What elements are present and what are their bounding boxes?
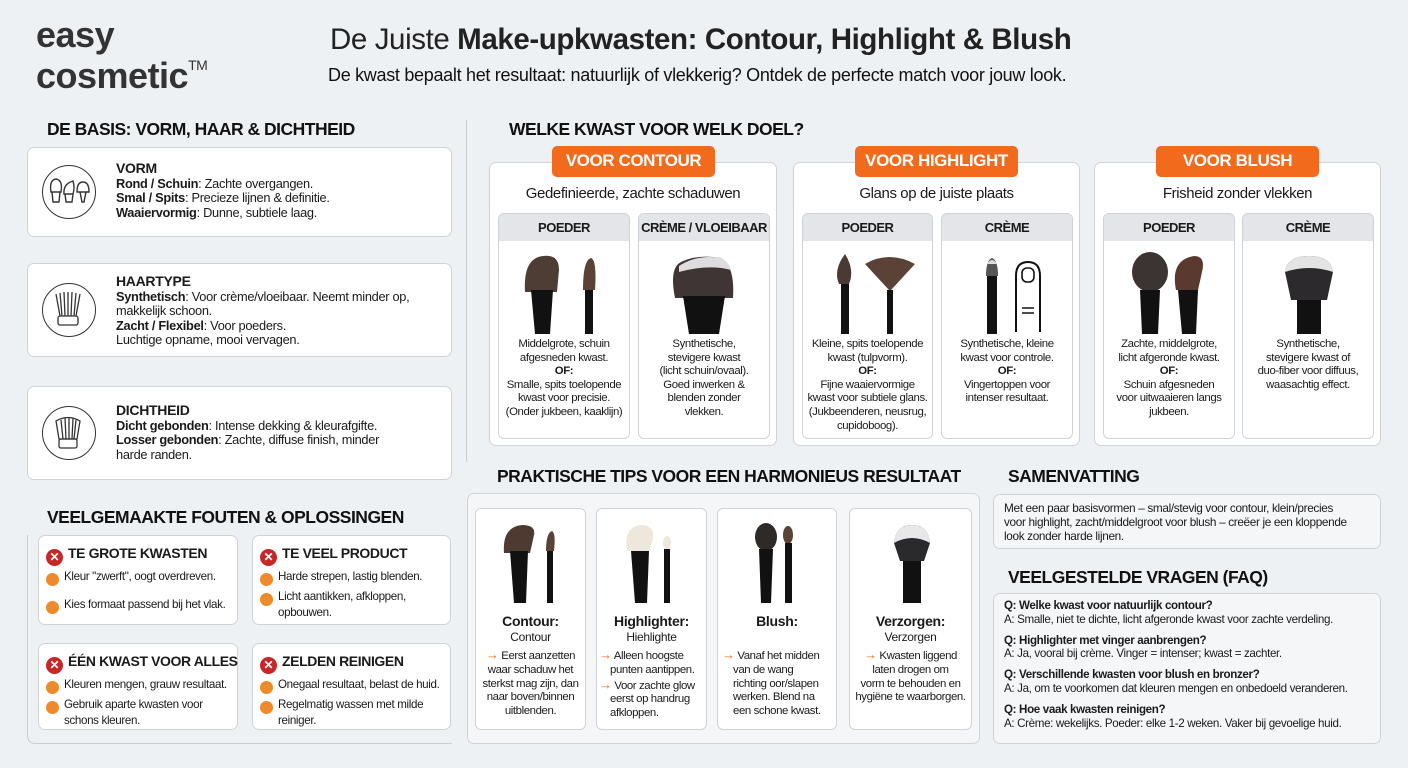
sub: poeder: POEDER [842, 220, 893, 235]
text: haartype: HAARTYPE [116, 273, 191, 289]
tip: highlighter: Hiehlighte [626, 630, 677, 644]
text block: samenvatting: voor highlight, zacht/middelgroot voor blush – creëer je een kloppende [1004, 515, 1347, 529]
brushes [837, 254, 915, 334]
card: zelden reinigen: ZELDEN REINIGEN [282, 653, 404, 669]
text: haartype: Synthetisch: Voor crème/vloeibaar. Neemt minder op, [116, 288, 409, 304]
sub: creme: Synthetische, [672, 338, 736, 350]
card: haartype [27, 263, 452, 357]
tip: verzorgen [849, 508, 972, 730]
card: zelden reinigen [252, 643, 451, 730]
sub: poeder: Middelgrote, schuin [518, 338, 610, 350]
title: De Juiste Make-upkwasten: Contour, Highlight & Blush [330, 23, 1071, 56]
tip: verzorgen: laten drogen om [872, 664, 949, 676]
panel: faq: Q: Hoe vaak kwasten reinigen? [1004, 703, 1165, 716]
panel: highlight [793, 162, 1080, 446]
tip: highlighter: afkloppen. [610, 707, 659, 719]
tip: verzorgen: vorm te behouden en [860, 678, 961, 690]
subtitle: De kwast bepaalt het resultaat: natuurlijk of vlekkerig? Ontdek de perfecte match voor jouw look. [328, 65, 1066, 85]
heading: praktische tips: PRAKTISCHE TIPS VOOR EEN HARMONIEUS RESULTAAT [497, 466, 961, 486]
tip: highlighter: Highlighter: [614, 613, 689, 629]
card: te grote kwasten [38, 535, 238, 625]
text: vorm [116, 160, 330, 220]
badge: voor contour [552, 146, 715, 177]
sub: poeder: POEDER [1143, 220, 1195, 235]
heading: samenvatting: SAMENVATTING [1008, 466, 1139, 486]
text: vorm: Waaiervormig: Dunne, subtiele laag. [116, 204, 317, 220]
sub: creme: Synthetische, [1276, 338, 1340, 350]
card: zelden reinigen: Regelmatig wassen met milde [278, 698, 423, 711]
panel: faq: A: Ja, vooral bij crème. Vinger = intenser; kwast = zachter. [1004, 647, 1282, 660]
sub: poeder: (Jukbeenderen, neusrug, [809, 406, 926, 418]
sub: poeder: kwast (tulpvorm). [828, 352, 907, 364]
card: een kwast voor alles: Kleuren mengen, grauw resultaat. [64, 678, 227, 691]
icon: brush shapes [42, 165, 96, 219]
card: te grote kwasten: Kleur "zwerft", oogt overdreven. [64, 570, 216, 583]
badge: voor highlight [855, 146, 1018, 177]
card: dichtheid [27, 386, 452, 480]
sub: poeder: POEDER [538, 220, 590, 235]
tip: contour: sterkst mag zijn, dan [482, 678, 579, 690]
panel: faq: A: Crème: wekelijks. Poeder: elke 1-2 weken. Vaker bij gevoelige huid. [1004, 717, 1341, 730]
card: zelden reinigen: ✕ [263, 658, 274, 672]
heading: fouten: VEELGEMAAKTE FOUTEN & OPLOSSINGEN [47, 507, 404, 527]
text: vorm: VORM [116, 160, 157, 176]
sub: creme: kwast voor controle. [960, 352, 1054, 364]
panel: blush [1094, 162, 1381, 446]
text: haartype: Luchtige opname, mooi vervagen. [116, 332, 300, 347]
card: zelden reinigen: ✓ [254, 702, 261, 712]
brush [1285, 256, 1333, 334]
sub: creme [1242, 213, 1374, 439]
tip: blush: richting oor/slapen [733, 678, 819, 690]
tip: blush: een schone kwast. [733, 705, 821, 717]
tip: contour: Contour: [502, 613, 559, 629]
sub: poeder: kwast voor precisie. [518, 392, 610, 404]
card: zelden reinigen: Onegaal resultaat, belast de huid. [278, 678, 439, 691]
panel: faq: A: Ja, om te voorkomen dat kleuren mengen en onbedoeld veranderen. [1004, 682, 1348, 695]
sub: poeder: OF: [555, 365, 573, 377]
card: te grote kwasten: ✓ [40, 602, 47, 612]
panel: faq: A: Smalle, niet te dichte, licht afgeronde kwast voor zachte verdeling. [1004, 613, 1333, 626]
card: te veel product: Licht aantikken, afkloppen, [278, 590, 406, 603]
card: te grote kwasten: ✓ [40, 574, 47, 584]
badge: voor blush [1156, 146, 1319, 177]
card: te grote kwasten: Kies formaat passend bij het vlak. [64, 598, 225, 611]
panel: faq: Q: Welke kwast voor natuurlijk contour? [1004, 599, 1212, 612]
sub: poeder: voor uitwaaieren langs [1116, 392, 1222, 404]
sub: poeder: OF: [858, 365, 877, 377]
card: te grote kwasten: ✕ [49, 550, 60, 564]
sub: poeder: (Onder jukbeen, kaaklijn) [506, 406, 622, 418]
text block: samenvatting: look zonder harde lijnen. [1004, 529, 1124, 543]
tip: contour: → Eerst aanzetten [486, 647, 575, 662]
text: haartype [116, 273, 409, 347]
sub: creme: (licht schuin/ovaal). [659, 365, 749, 377]
tip: highlighter: → Alleen hoogste [599, 647, 684, 662]
sub: creme: stevigere kwast [668, 352, 740, 364]
text block: samenvatting [993, 494, 1381, 549]
panel: contour [489, 162, 777, 446]
card: een kwast voor alles: schons kleuren. [64, 714, 140, 727]
sub: poeder: Smalle, spits toelopende [507, 379, 621, 391]
tip: verzorgen: hygiëne te waarborgen. [855, 691, 966, 703]
text: haartype: Zacht / Flexibel: Voor poeders. [116, 318, 286, 332]
subheading: Glans op de juiste plaats [859, 185, 1014, 202]
tip: contour: uitblenden. [505, 705, 556, 717]
icon: bristles [42, 283, 96, 337]
brushes [1132, 252, 1203, 334]
tip: verzorgen: → Kwasten liggend [864, 647, 957, 662]
badge: voor highlight: VOOR HIGHLIGHT [865, 151, 1008, 170]
sub: poeder [498, 213, 630, 439]
card: een kwast voor alles [38, 643, 238, 730]
sub: poeder: afgesneden kwast. [520, 352, 608, 364]
text: vorm: Smal / Spits: Precieze lijnen & definitie. [116, 190, 330, 205]
panel: faq: Q: Verschillende kwasten voor blush en bronzer? [1004, 668, 1259, 681]
card: een kwast voor alles: ✓ [40, 682, 47, 692]
sub: poeder: cupidoboog). [837, 420, 898, 432]
brushes [524, 256, 596, 334]
subheading: Gedefinieerde, zachte schaduwen [526, 185, 740, 202]
card: een kwast voor alles: ✕ [49, 658, 60, 672]
card: te veel product: ✓ [254, 574, 261, 584]
sub: poeder: jukbeen. [1149, 406, 1189, 418]
panel: fouten [27, 535, 452, 744]
text: dichtheid: DICHTHEID [116, 402, 190, 418]
tip: contour: Contour [510, 630, 551, 644]
tip: highlighter: punten aantippen. [610, 664, 694, 676]
sub: creme: CRÈME [985, 220, 1029, 235]
card: te veel product: ✕ [263, 550, 274, 564]
panel: faq [993, 593, 1381, 744]
sub: creme: vlekken. [685, 406, 723, 418]
text: vorm: Rond / Schuin: Zachte overgangen. [116, 176, 313, 190]
panel: tips [467, 493, 980, 744]
sub: creme: blenden zonder [668, 392, 740, 404]
sub: poeder [1103, 213, 1235, 439]
sub: creme: duo-fiber voor diffuus, [1258, 365, 1358, 377]
card: zelden reinigen: ✓ [254, 682, 261, 692]
sub: creme: Synthetische, kleine [960, 338, 1054, 350]
sub: poeder: Fijne waaiervormige [820, 379, 915, 391]
badge: voor blush: VOOR BLUSH [1183, 151, 1292, 170]
sub: poeder: Kleine, spits toelopende [812, 338, 923, 350]
sub: creme: OF: [998, 365, 1016, 377]
sub: creme [638, 213, 770, 439]
card: zelden reinigen: reiniger. [278, 714, 316, 727]
card: te veel product [252, 535, 451, 625]
logo: easy [36, 14, 114, 55]
tip: highlighter [596, 508, 707, 730]
sub: poeder: licht afgeronde kwast. [1118, 352, 1220, 364]
sub: poeder: kwast voor subtiele glans. [807, 392, 928, 404]
sub: poeder: Schuin afgesneden [1124, 379, 1214, 391]
sub: creme: stevigere kwast of [1266, 352, 1350, 364]
logo [36, 14, 207, 96]
heading: welke kwast: WELKE KWAST VOOR WELK DOEL? [509, 119, 804, 139]
card: een kwast voor alles: ✓ [40, 702, 47, 712]
card: een kwast voor alles: ÉÉN KWAST VOOR ALLES [68, 653, 238, 669]
tip: verzorgen: Verzorgen: [876, 613, 945, 629]
tip: blush: → Vanaf het midden [722, 647, 819, 662]
heading: faq: VEELGESTELDE VRAGEN (FAQ) [1008, 567, 1268, 587]
logo: cosmeticTM [36, 55, 207, 96]
text: dichtheid [116, 402, 380, 462]
tip: contour: naar boven/binnen [487, 691, 574, 703]
subheading: Frisheid zonder vlekken [1163, 185, 1312, 202]
card: te grote kwasten: TE GROTE KWASTEN [68, 545, 207, 561]
sub: creme: Vingertoppen voor [964, 379, 1050, 391]
text: dichtheid: Losser gebonden: Zachte, diffuse finish, minder [116, 432, 379, 447]
sub: creme: CRÈME [1286, 220, 1330, 235]
badge: voor contour: VOOR CONTOUR [566, 151, 701, 170]
card: te veel product: TE VEEL PRODUCT [282, 545, 407, 561]
card: vorm [27, 147, 452, 237]
text: dichtheid: Dicht gebonden: Intense dekking & kleurafgifte. [116, 418, 377, 432]
sub: creme [941, 213, 1073, 439]
sub: creme: CRÈME / VLOEIBAAR [641, 220, 767, 235]
tip: contour [475, 508, 586, 730]
tip: highlighter: → Voor zachte glow [599, 677, 695, 692]
card: te veel product: Harde strepen, lastig blenden. [278, 570, 422, 583]
tip: verzorgen: Verzorgen [884, 630, 936, 644]
card: een kwast voor alles: Gebruik aparte kwasten voor [64, 698, 203, 711]
brush and finger [986, 258, 1041, 334]
sub: poeder: OF: [1160, 365, 1178, 377]
card: te veel product: opbouwen. [278, 606, 332, 619]
sub: creme: Goed inwerken & [663, 379, 745, 391]
sub: creme: intenser resultaat. [966, 392, 1048, 404]
brush [673, 256, 734, 334]
tip: highlighter: eerst op handrug [610, 693, 690, 705]
tip: contour: waar schaduw het [488, 664, 573, 676]
heading: de basis: DE BASIS: VORM, HAAR & DICHTHEID [47, 119, 355, 139]
text: dichtheid: harde randen. [116, 446, 192, 462]
sub: creme: waasachtig effect. [1266, 379, 1350, 391]
icon: dense brush [42, 406, 96, 460]
tip: blush [717, 508, 837, 730]
tip: blush: van de wang [733, 664, 793, 676]
text block: samenvatting: Met een paar basisvormen – smal/stevig voor contour, klein/precies [1004, 501, 1333, 515]
card: te veel product: ✓ [254, 594, 261, 604]
panel: faq: Q: Highlighter met vinger aanbrengen? [1004, 634, 1206, 647]
tip: blush: Blush: [756, 613, 798, 629]
sub: poeder: Zachte, middelgrote, [1121, 338, 1217, 350]
tip: blush: werken. Blend na [733, 691, 815, 703]
text: haartype: makkelijk schoon. [116, 303, 212, 318]
sub: poeder [802, 213, 933, 439]
